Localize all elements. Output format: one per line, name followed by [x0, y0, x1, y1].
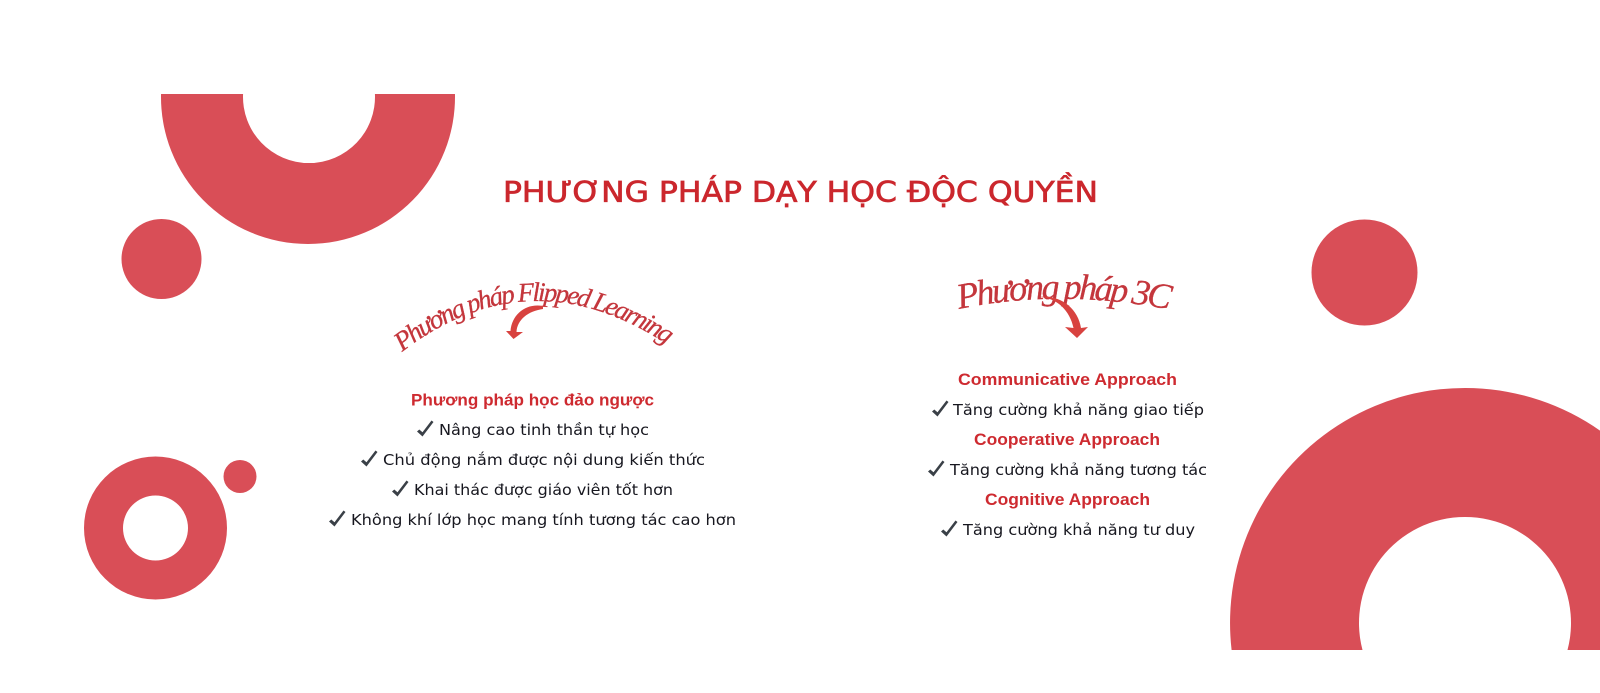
title: PHƯƠNG PHÁP DẠY HỌC ĐỘC QUYỀN [503, 172, 1098, 209]
icon: check [928, 460, 944, 476]
script heading: Flipped Learning: Phương pháp Flipped Learning [394, 282, 673, 352]
benefit 4: Không khí lớp học mang tính tương tác cao hơn [351, 511, 736, 529]
arrow: Flipped Learning [506, 306, 543, 339]
icon: check [329, 510, 346, 526]
subheading: Cognitive Approach: Cognitive Approach [985, 490, 1150, 509]
icon: check [941, 520, 958, 536]
arrow: 3C [1038, 297, 1088, 338]
subheading: Cooperative Approach: Cooperative Approach [974, 430, 1160, 449]
decoration: left circle [122, 219, 202, 299]
script heading: 3C: Phương pháp 3C [958, 274, 1174, 310]
benefit 3: Khai thác được giáo viên tốt hơn [414, 481, 673, 499]
panel: 3C method [928, 274, 1207, 539]
decoration: small circle [224, 460, 256, 493]
decoration: large bottom right ring [1230, 388, 1600, 650]
decoration: top half ring [161, 94, 455, 244]
benefit 1: Nâng cao tinh thần tự học [439, 421, 649, 439]
icon: check [932, 400, 948, 416]
subheading: Communicative Approach: Communicative Approach [958, 370, 1177, 389]
icon: check [417, 420, 434, 436]
benefit: communication: Tăng cường khả năng giao tiếp [952, 401, 1204, 419]
benefit: interaction: Tăng cường khả năng tương tác [949, 461, 1207, 479]
decoration: right circle [1312, 220, 1418, 326]
decoration: lower left ring [84, 456, 227, 599]
benefit: thinking: Tăng cường khả năng tư duy [962, 521, 1195, 539]
benefit 2: Chủ động nắm được nội dung kiến thức [383, 451, 705, 469]
icon: check [361, 450, 378, 466]
panel: Flipped Learning [329, 282, 736, 529]
subheading: reverse learning: Phương pháp học đảo ngược [411, 390, 654, 410]
icon: check [392, 480, 408, 496]
